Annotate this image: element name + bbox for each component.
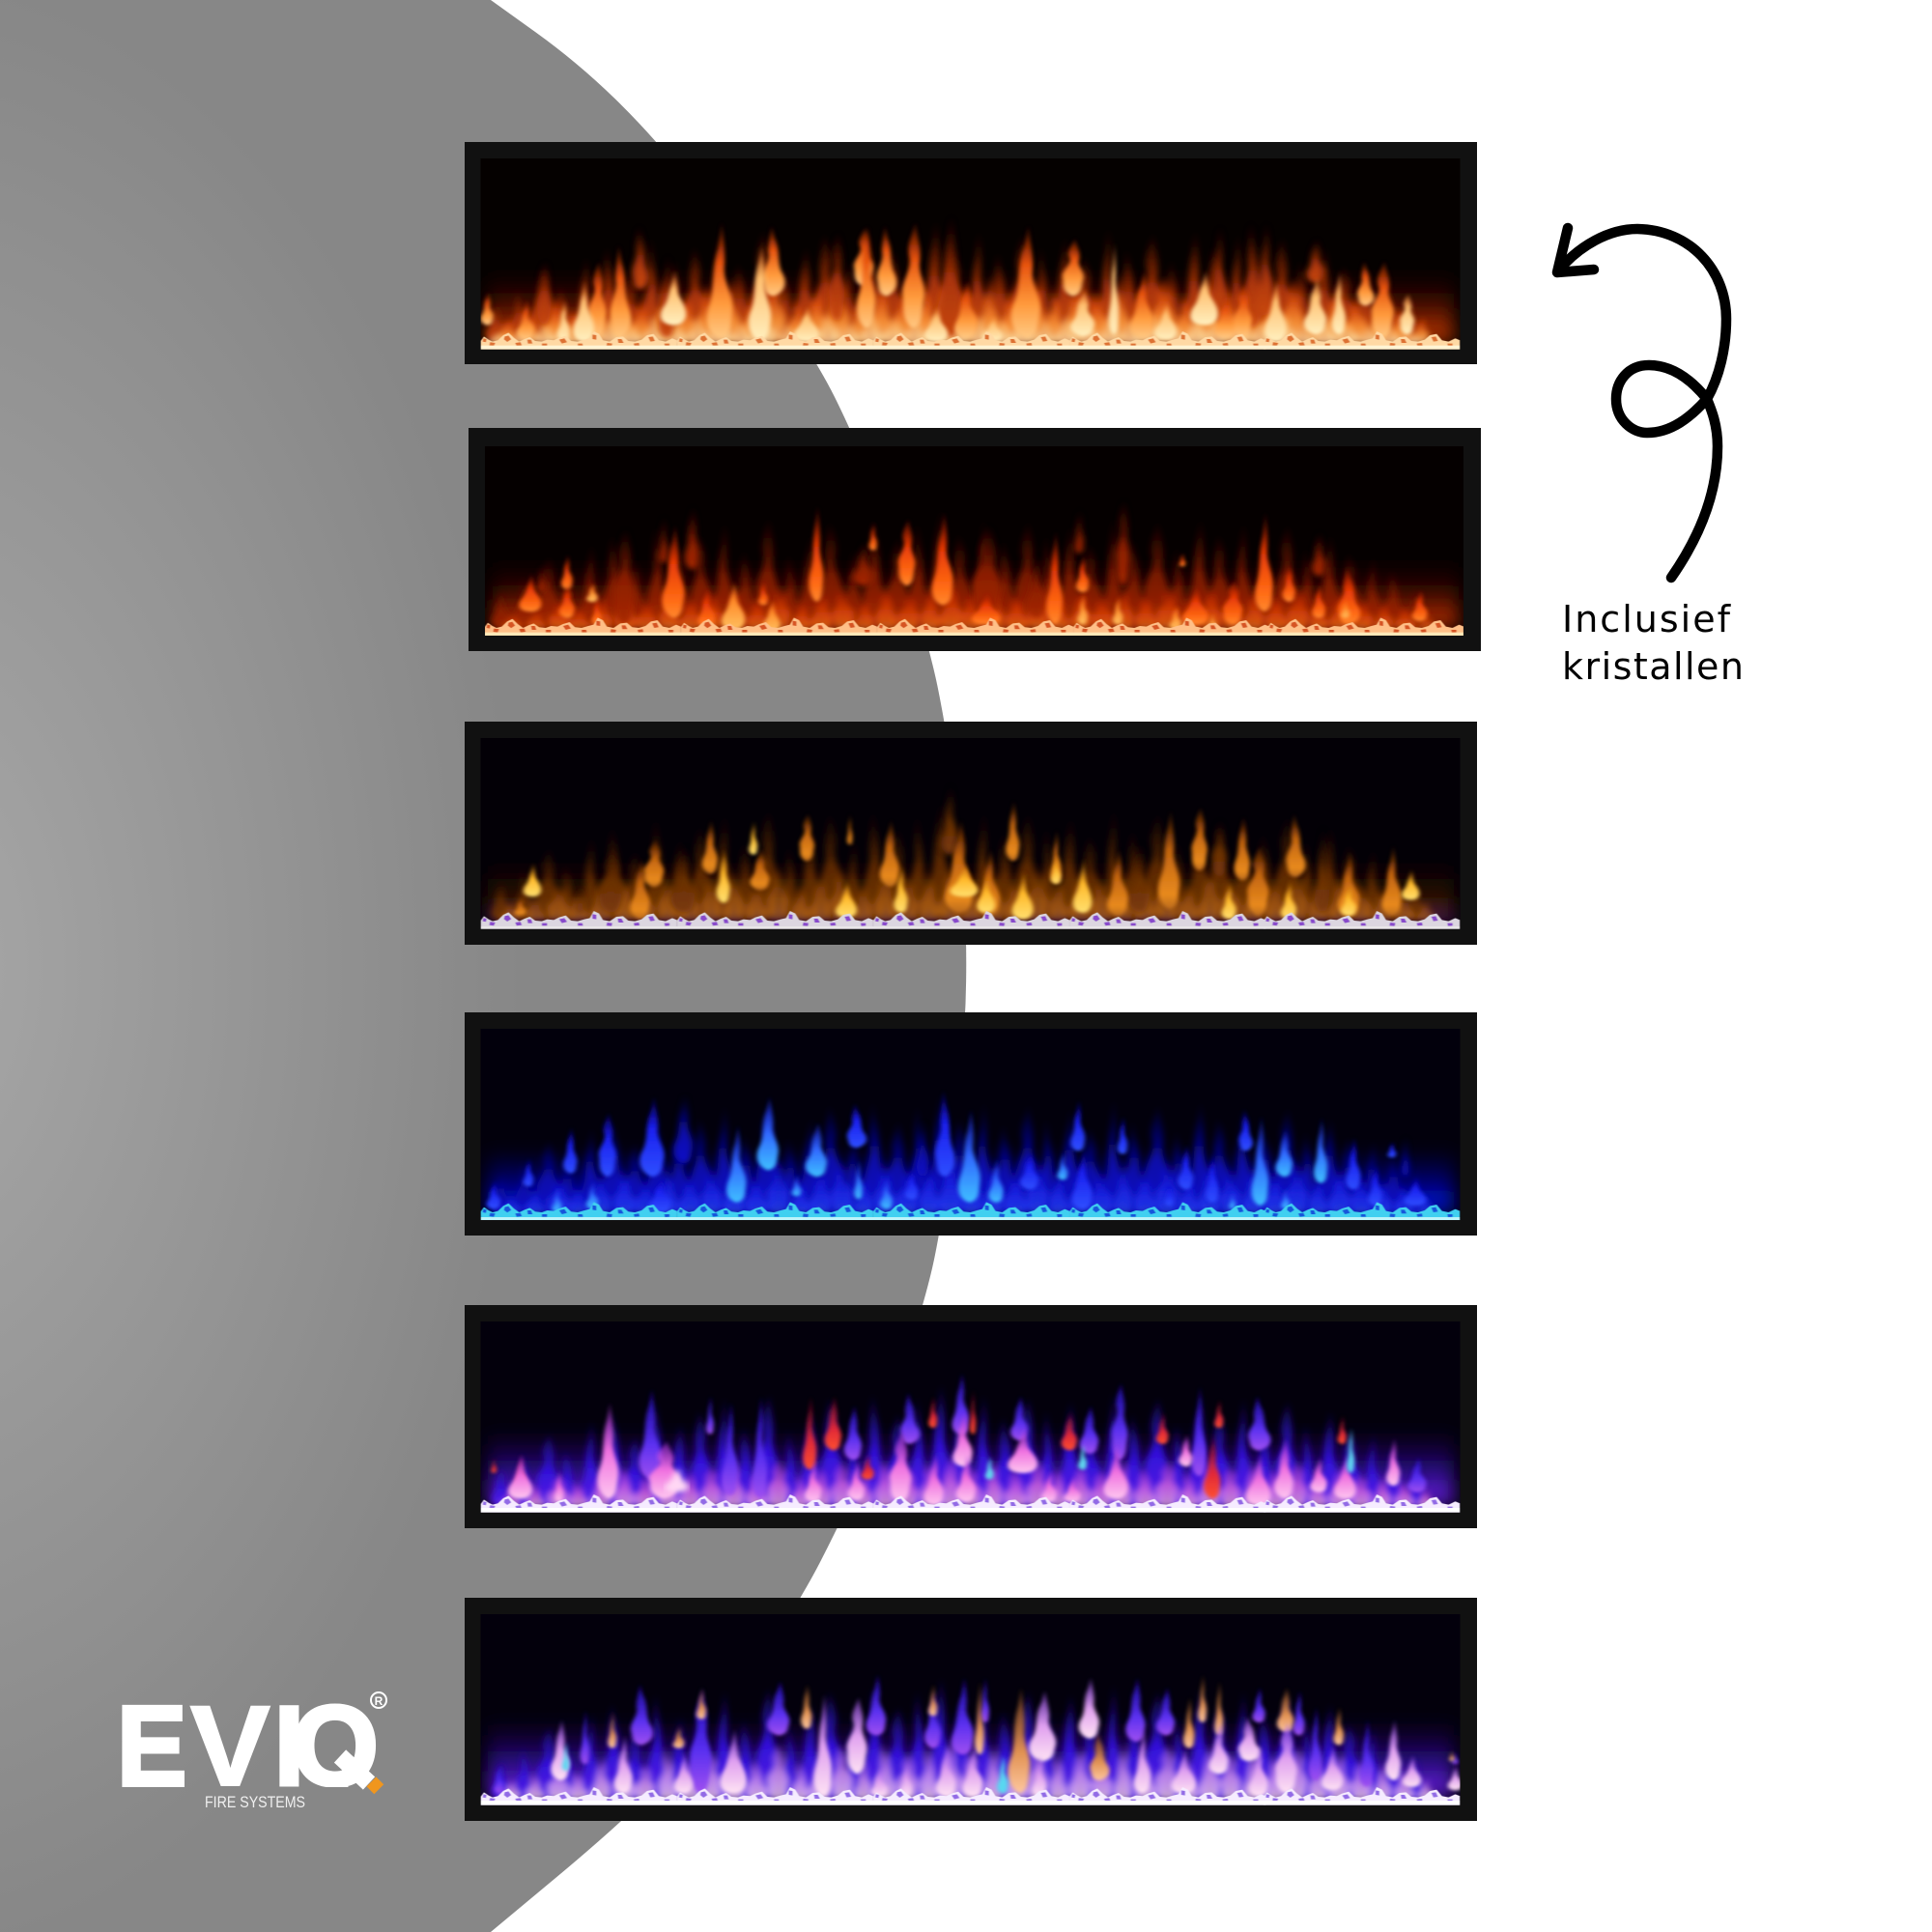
frame 1 xyxy=(465,142,1477,364)
fireplace 2: red flames xyxy=(469,428,1481,651)
flame glow 3 xyxy=(488,860,1454,923)
fireplace 4: blue flames xyxy=(465,1012,1477,1236)
caption: Inclusief kristallen: Inclusief xyxy=(1562,598,1732,640)
frame 2 xyxy=(469,428,1481,651)
crystals 4 xyxy=(481,1202,1460,1220)
logo tagline: FIRE SYSTEMS xyxy=(205,1793,305,1811)
flame glow 2 xyxy=(493,560,1459,628)
crystals 1 xyxy=(481,331,1460,350)
flames 4 xyxy=(487,1090,1434,1214)
flame glow 6 xyxy=(488,1719,1454,1797)
frame 6 xyxy=(465,1598,1477,1821)
fireplace 1: orange flames xyxy=(465,142,1477,364)
logo: EVIQ Fire Systems: E xyxy=(117,1683,186,1810)
frame 3 xyxy=(465,722,1477,945)
icon: hand-drawn curly arrow xyxy=(1557,228,1726,578)
logo: EVIQ Fire Systems: Q xyxy=(292,1682,379,1809)
registered mark xyxy=(371,1692,386,1708)
flames 2 xyxy=(492,499,1435,631)
crystals 2 xyxy=(485,617,1463,636)
flames 6 xyxy=(492,1674,1463,1800)
flames 3 xyxy=(492,784,1434,921)
fireplace 5: violet, pink and red flames xyxy=(465,1305,1477,1528)
logo: EVIQ Fire Systems xyxy=(122,1691,387,1807)
flame glow 5 xyxy=(488,1430,1454,1505)
frame 5 xyxy=(465,1305,1477,1528)
grey half-circle backdrop xyxy=(0,0,966,1932)
registered mark: R xyxy=(375,1694,384,1708)
logo: EVIQ Fire Systems: I xyxy=(273,1683,305,1810)
frame 4 xyxy=(465,1012,1477,1236)
logo orange tip xyxy=(367,1777,384,1794)
flame glow 4 xyxy=(488,1150,1454,1212)
logo: EVIQ Fire Systems: V xyxy=(190,1682,270,1809)
crystals 3 xyxy=(481,911,1460,929)
fireplace 6: violet, pink and peach flames xyxy=(465,1598,1477,1821)
fireplace 3: amber flames on violet crystals xyxy=(465,722,1477,945)
crystals 5 xyxy=(481,1494,1460,1513)
caption: Inclusief kristallen: kristallen xyxy=(1562,645,1744,688)
crystals 6 xyxy=(481,1787,1460,1805)
logo Q tail xyxy=(340,1756,369,1783)
flame glow 1 xyxy=(488,270,1454,343)
flames 5 xyxy=(492,1374,1434,1507)
flames 1 xyxy=(481,215,1430,345)
